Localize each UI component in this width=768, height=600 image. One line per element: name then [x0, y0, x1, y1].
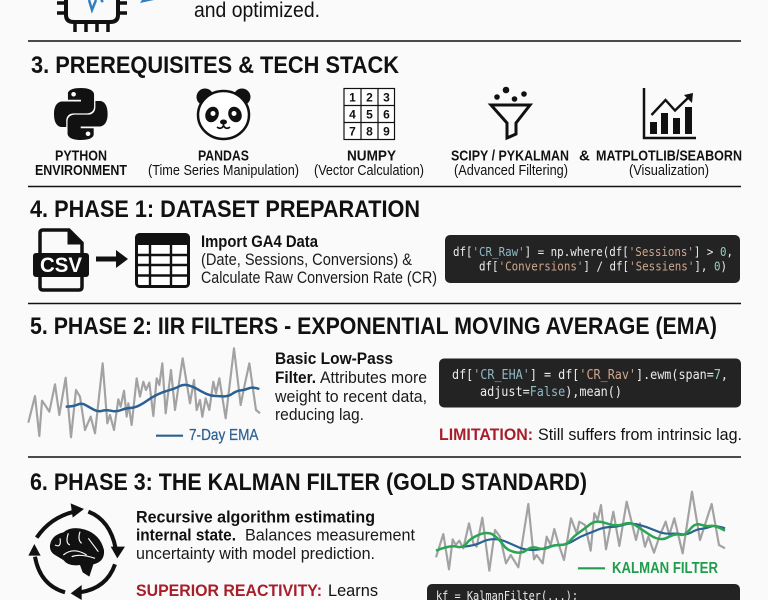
icon: numpy number grid: 7 — [349, 124, 356, 138]
heading: section 3: 3. PREREQUISITES & TECH STACK — [31, 52, 399, 79]
text: import description: Import GA4 Data — [201, 232, 318, 251]
text: Kalman description — [136, 508, 415, 563]
line chart: raw data and 7-day EMA — [28, 348, 260, 437]
icon: funnel — [491, 87, 530, 138]
code block: Kalman — [427, 584, 740, 600]
panel: phase 3 Kalman filter — [28, 469, 740, 600]
icon: numpy number grid: 9 — [383, 124, 390, 138]
panel: top section remnant — [57, 0, 320, 32]
text: EMA description — [274, 349, 427, 424]
legend: 7-day EMA: 7-Day EMA — [189, 427, 259, 444]
label: matplotlib description: (Visualization) — [629, 162, 709, 179]
icon: csv file — [33, 230, 89, 290]
label: scipy description: (Advanced Filtering) — [454, 162, 568, 179]
heading: section 6: 6. PHASE 3: THE KALMAN FILTER (GOLD STANDARD) — [30, 469, 587, 496]
text: Kalman description: Recursive algorithm estimating — [136, 508, 375, 526]
text: EMA description: weight to recent data, — [274, 387, 427, 406]
callout: limitation — [439, 425, 742, 444]
code block: raw conversion rate: df['CR_Raw'] = np.where(df['Sessions'] > 0, — [453, 244, 733, 259]
label: pandas description: (Time Series Manipulation) — [148, 162, 299, 179]
text: Kalman description: uncertainty with model prediction. — [136, 544, 375, 563]
panel: prerequisites and tech stack — [31, 52, 742, 179]
icon: chip with pulse — [57, 0, 154, 32]
callout: superior reactivity: Learns — [328, 581, 378, 600]
icon: growth chart — [644, 88, 696, 138]
text: import description: Calculate Raw Conversion Rate (CR) — [201, 268, 437, 287]
icon: numpy number grid: 4 — [349, 108, 356, 122]
icon: brain in cycle arrows — [28, 503, 125, 600]
icon: numpy number grid: 2 — [366, 90, 373, 104]
icon: numpy number grid: 1 — [349, 90, 356, 104]
text: Kalman description: internal state. — [136, 526, 236, 544]
icon: numpy number grid — [344, 88, 394, 140]
icon: python — [54, 88, 108, 140]
text: EMA description: Filter. — [275, 368, 316, 387]
line chart: raw data, EMA and Kalman — [436, 492, 725, 571]
arrow: csv to table — [96, 250, 128, 268]
text: EMA description: Attributes more — [320, 368, 427, 387]
heading: section 4: 4. PHASE 1: DATASET PREPARATION — [30, 196, 420, 223]
label: scipy pykalman: SCIPY / PYKALMAN — [451, 148, 569, 164]
panel: phase 2 EMA — [28, 313, 742, 444]
label: numpy: NUMPY — [347, 148, 396, 164]
icon: numpy number grid: 3 — [383, 90, 390, 104]
icon: numpy number grid: 5 — [366, 108, 373, 122]
code block: EMA — [439, 358, 741, 408]
icon: data table — [136, 234, 189, 286]
callout: limitation: Still suffers from intrinsic lag. — [538, 425, 742, 444]
code block: EMA: adjust=False),mean() — [480, 385, 622, 400]
icon: panda — [196, 88, 250, 139]
label: ampersand: & — [579, 148, 590, 164]
code block: EMA: df['CR_EHA'] = df['CR_Rav'].ewm(span=7, — [452, 368, 728, 383]
label: numpy description: (Vector Calculation) — [314, 162, 424, 179]
code block: raw conversion rate — [445, 235, 740, 283]
label: pandas: PANDAS — [198, 148, 249, 164]
label: environment: ENVIRONMENT — [35, 162, 127, 179]
text: EMA description: reducing lag. — [275, 405, 364, 424]
legend: Kalman filter: KALMAN FILTER — [612, 560, 718, 577]
code block: raw conversion rate: df['Conversions'] / df['Sessiens'], 0) — [479, 258, 727, 274]
callout: limitation: LIMITATION: — [439, 425, 533, 444]
callout: superior reactivity: SUPERIOR REACTIVITY: — [136, 581, 322, 600]
icon: numpy number grid: 8 — [366, 124, 373, 138]
text: import description — [201, 232, 437, 287]
label: matplotlib seaborn: MATPLOTLIB/SEABORN — [596, 148, 742, 164]
label: python: PYTHON — [55, 148, 107, 164]
text: import description: (Date, Sessions, Conversions) & — [201, 250, 413, 269]
icon: csv file: CSV — [40, 254, 82, 277]
legend: 7-day EMA — [156, 427, 259, 444]
text: Kalman description: Balances measurement — [245, 526, 415, 544]
panel: phase 1 dataset preparation — [30, 196, 740, 290]
text: EMA description: Basic Low-Pass — [275, 349, 393, 368]
icon: numpy number grid: 6 — [383, 108, 390, 122]
